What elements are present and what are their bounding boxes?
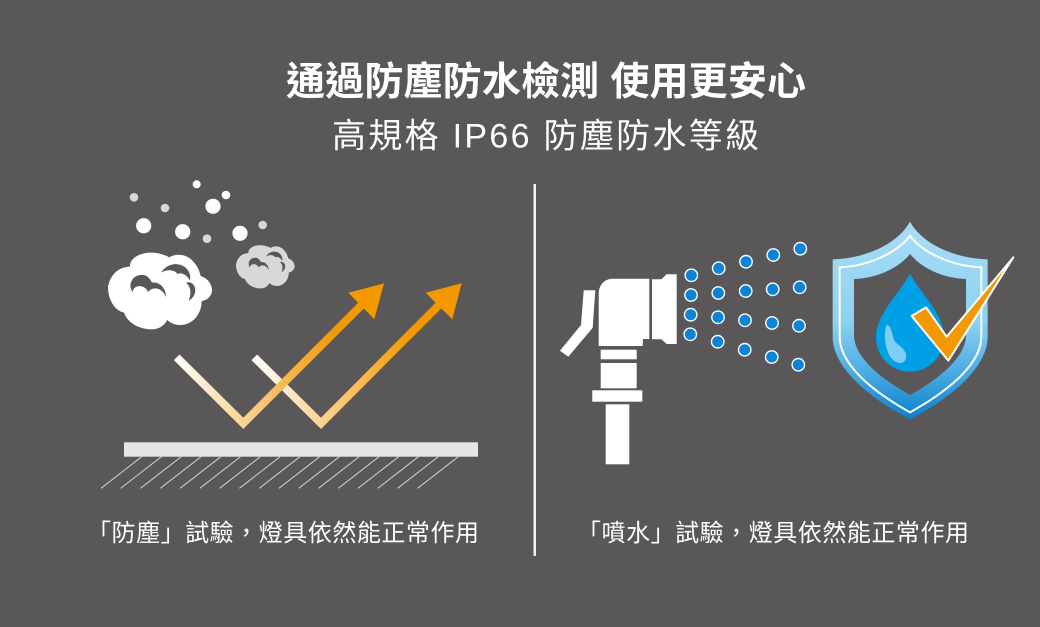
shield white outline (840, 236, 981, 412)
water spray dots (684, 242, 806, 371)
icon: shield with water drop and check (833, 222, 1013, 419)
water drop (876, 273, 944, 372)
panel: water test (560, 222, 1013, 547)
surface hatching (101, 457, 458, 488)
dust particles (130, 180, 267, 243)
surface plate (124, 442, 478, 457)
panel: dust test (87, 180, 479, 547)
subtitle: 高規格 IP66 防塵防水等級 (332, 118, 759, 156)
shield outer (833, 222, 988, 419)
water caption: 「噴水」試驗，燈具依然能正常作用 (577, 520, 969, 547)
icon: large dust cloud (108, 253, 212, 329)
drop highlight (885, 325, 906, 363)
arrow: second reflected path (254, 283, 462, 423)
dust caption: 「防塵」試驗，燈具依然能正常作用 (87, 520, 479, 547)
arrow: first reflected path (177, 283, 384, 423)
divider (534, 184, 536, 556)
icon: small dust cloud (236, 245, 295, 288)
icon: spray nozzle (560, 274, 677, 464)
title: 通過防塵防水檢測 使用更安心 (286, 61, 806, 104)
check mark (912, 257, 1013, 361)
